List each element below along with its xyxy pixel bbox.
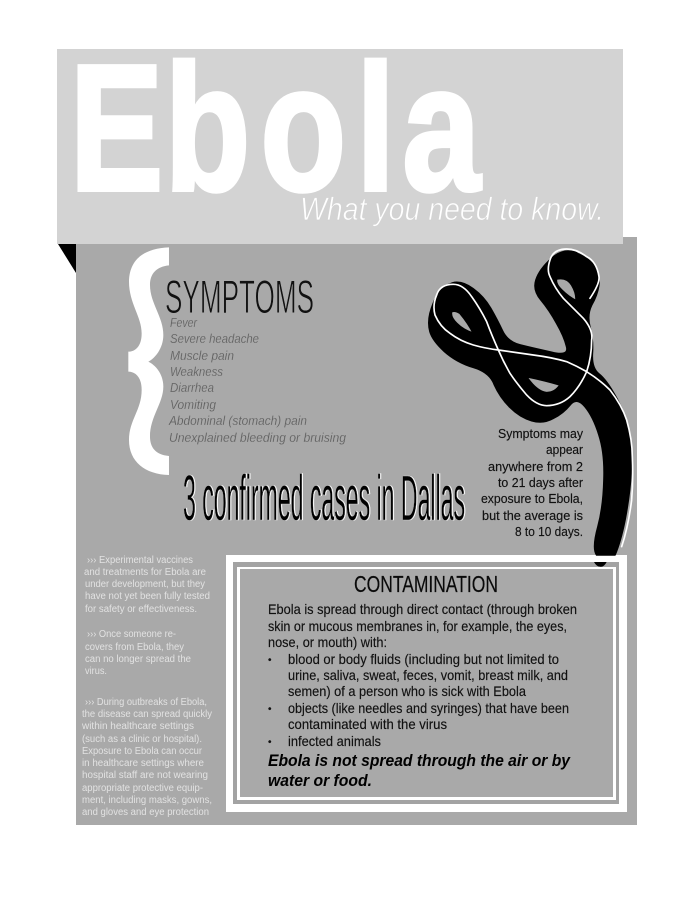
symptoms list: Fever <box>170 315 198 330</box>
text block: sidebar notes: hospital staff are not wearing <box>82 770 208 781</box>
heading: contamination: CONTAMINATION <box>354 571 498 597</box>
text block: incubation period: but the average is <box>482 508 583 523</box>
text block: incubation period <box>481 426 584 539</box>
text block: sidebar notes: Exposure to Ebola can occur <box>82 746 203 757</box>
symptoms list: Weakness <box>170 364 223 379</box>
title: Ebola <box>70 28 481 229</box>
text block: sidebar notes: ››› During outbreaks of Ebola, <box>85 697 207 708</box>
text block: contamination details <box>268 601 577 749</box>
panel: header band <box>57 49 623 244</box>
text block: contamination details: semen) of a person who is sick with Ebola <box>288 683 526 699</box>
text block: sidebar notes: ››› Experimental vaccines <box>87 555 193 566</box>
text block: sidebar notes: (such as a clinic or hospital). <box>82 734 202 745</box>
text block: sidebar notes: for safety or effectiveness. <box>85 604 197 615</box>
text block: contamination details: urine, saliva, sweat, feces, vomit, breast milk, and <box>288 667 568 683</box>
text block: incubation period: to 21 days after <box>498 475 584 490</box>
text block: sidebar notes: covers from Ebola, they <box>85 642 184 653</box>
text block: incubation period: Symptoms may <box>498 426 583 441</box>
symptoms list: Muscle pain <box>170 348 234 363</box>
text block: sidebar notes: ››› Once someone re- <box>87 629 176 640</box>
symptoms list: Unexplained bleeding or bruising <box>169 430 347 445</box>
text block: sidebar notes: virus. <box>85 666 107 677</box>
text block: sidebar notes: ment, including masks, gowns, <box>82 795 212 806</box>
icon: white curly brace <box>128 247 169 475</box>
text block: incubation period: 8 to 10 days. <box>515 524 583 539</box>
text block: contamination details: skin or mucous membranes in, for example, the eyes, <box>268 618 567 634</box>
text block: incubation period: appear <box>546 442 584 457</box>
symptoms list: Vomiting <box>170 397 217 412</box>
text block: incubation period: anywhere from 2 <box>488 459 583 474</box>
text block: sidebar notes: have not yet been fully tested <box>85 591 210 602</box>
icon: ebola virus ribbon <box>429 249 633 567</box>
callout: not airborne: Ebola is not spread through the air or by <box>268 751 571 770</box>
text block: sidebar notes: and gloves and eye protection <box>82 807 209 818</box>
text block: sidebar notes: can no longer spread the <box>85 654 191 665</box>
text block: sidebar notes: the disease can spread quickly <box>82 709 212 720</box>
heading: symptoms: SYMPTOMS <box>165 270 314 323</box>
text block: contamination details: objects (like needles and syringes) that have been <box>288 700 569 716</box>
text block: contamination details: • <box>268 737 272 748</box>
callout: not airborne <box>268 751 571 790</box>
panel: contamination frame <box>226 555 627 812</box>
black triangle accent <box>58 244 76 273</box>
text block: contamination details: blood or body fluids (including but not limited to <box>288 651 559 667</box>
text block: sidebar notes <box>81 555 212 818</box>
symptoms list: Diarrhea <box>170 380 214 395</box>
text block: sidebar notes: and treatments for Ebola are <box>84 567 206 578</box>
symptoms list: Severe headache <box>170 331 259 346</box>
callout: not airborne: water or food. <box>268 771 372 790</box>
text block: contamination details: • <box>268 704 272 715</box>
text block: sidebar notes: appropriate protective equip- <box>82 783 203 794</box>
symptoms list: Abdominal (stomach) pain <box>168 413 307 428</box>
panel: main grey background <box>76 237 637 825</box>
text block: incubation period: exposure to Ebola, <box>481 491 583 506</box>
text block: contamination details: nose, or mouth) with: <box>268 634 387 650</box>
subtitle: What you need to know. <box>300 191 604 227</box>
text block: contamination details: infected animals <box>288 733 381 749</box>
text block: sidebar notes: in healthcare settings where <box>82 758 204 769</box>
text block: contamination details: • <box>268 655 272 666</box>
text block: sidebar notes: under development, but they <box>85 579 205 590</box>
symptoms list <box>168 315 347 445</box>
text block: contamination details: contaminated with the virus <box>288 716 447 732</box>
text block: contamination details: Ebola is spread through direct contact (through broken <box>268 601 577 617</box>
text block: sidebar notes: within healthcare settings <box>81 721 194 732</box>
